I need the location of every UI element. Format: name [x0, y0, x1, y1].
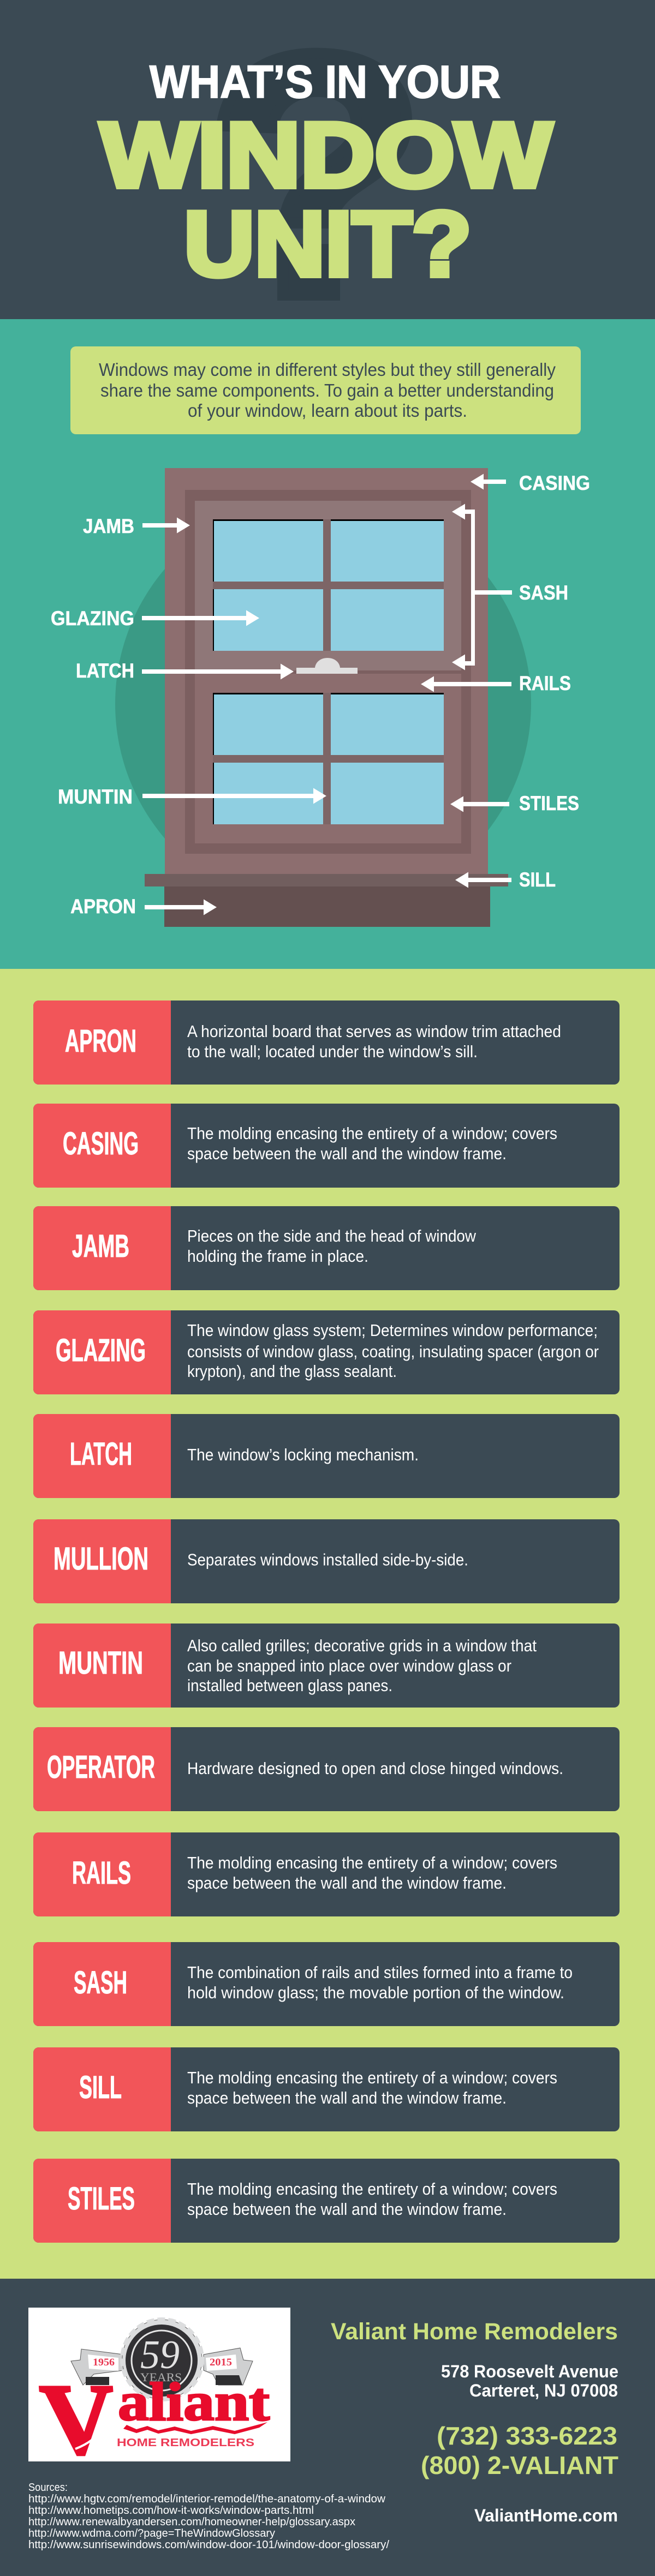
- arrow: jamb: [142, 517, 190, 534]
- jamb: [185, 490, 471, 854]
- card: jamb: Pieces on the side and the head of window: [187, 1226, 477, 1245]
- card: casing: The molding encasing the entirety of a window; covers: [187, 1124, 557, 1143]
- upper sash: [195, 501, 461, 670]
- arrow: apron: [145, 899, 217, 915]
- lower panes: [213, 693, 444, 824]
- title line 2: WINDOW: [100, 104, 552, 206]
- card: jamb: [33, 1206, 620, 1290]
- card: rails: The molding encasing the entirety of a window; covers: [187, 1853, 557, 1872]
- card: sash: SASH: [74, 1965, 127, 2000]
- card: rails: RAILS: [72, 1855, 131, 1891]
- diagram labels: GLAZING: [51, 607, 134, 630]
- card: glazing: [33, 1310, 620, 1394]
- card: stiles: [33, 2159, 620, 2243]
- address: [441, 2362, 618, 2400]
- card: apron: [33, 1001, 620, 1085]
- card: operator: OPERATOR: [47, 1750, 155, 1785]
- card: jamb: JAMB: [72, 1229, 129, 1264]
- card: apron: APRON: [65, 1023, 136, 1059]
- sources: http://www.hometips.com/how-it-works/window-parts.html: [28, 2505, 314, 2517]
- badge: 59: [140, 2333, 180, 2377]
- sources: http://www.sunrisewindows.com/window-door-101/window-door-glossary/: [28, 2539, 389, 2551]
- card: muntin: MUNTIN: [58, 1645, 143, 1681]
- logo: [28, 2308, 290, 2476]
- card: operator: Hardware designed to open and close hinged windows.: [187, 1759, 563, 1778]
- diagram labels: SILL: [519, 868, 556, 891]
- sources: http://www.renewalbyandersen.com/homeowner-help/glossary.aspx: [28, 2516, 355, 2528]
- card: muntin: can be snapped into place over window glass or: [187, 1656, 511, 1675]
- glossary panel: [0, 969, 655, 2279]
- sources: http://www.wdma.com/?page=TheWindowGlossary: [28, 2527, 275, 2539]
- arrow: muntin: [142, 788, 326, 804]
- valiant wordmark: aliant: [118, 2371, 270, 2432]
- card: rails: space between the wall and the window frame.: [187, 1873, 507, 1892]
- address: 578 Roosevelt Avenue: [441, 2362, 618, 2381]
- sources: Sources:: [28, 2482, 68, 2494]
- card: casing: [33, 1104, 620, 1188]
- header panel: [0, 0, 655, 369]
- card: casing: CASING: [63, 1126, 139, 1161]
- card: jamb: holding the frame in place.: [187, 1247, 368, 1266]
- badge: YEARS: [140, 2370, 182, 2384]
- card: sash: [33, 1942, 620, 2026]
- card: muntin: installed between glass panes.: [187, 1676, 392, 1695]
- card: latch: The window’s locking mechanism.: [187, 1445, 419, 1464]
- intro callout: share the same components. To gain a better understanding: [100, 380, 554, 400]
- diagram labels: CASING: [519, 472, 590, 494]
- card: sill: SILL: [79, 2070, 122, 2105]
- card: glazing: consists of window glass, coating, insulating spacer (argon or: [187, 1342, 599, 1361]
- latch: [296, 658, 358, 674]
- card: latch: LATCH: [70, 1436, 132, 1472]
- window illustration: [145, 468, 508, 927]
- casing: [165, 468, 488, 874]
- phone numbers: [421, 2422, 618, 2479]
- card: apron: A horizontal board that serves as window trim attached: [187, 1022, 561, 1041]
- diagram labels: LATCH: [76, 660, 134, 682]
- phone numbers: (800) 2-VALIANT: [421, 2451, 618, 2479]
- ribbons: [71, 2348, 253, 2385]
- logo: HOME REMODELERS: [117, 2437, 254, 2449]
- diagram labels: [51, 472, 590, 918]
- card: apron: to the wall; located under the window’s sill.: [187, 1042, 478, 1061]
- sources: [28, 2482, 389, 2551]
- card: casing: space between the wall and the window frame.: [187, 1144, 507, 1163]
- diagram labels: JAMB: [83, 515, 134, 537]
- card: sash: hold window glass; the movable portion of the window.: [187, 1983, 564, 2002]
- valiant wordmark: [38, 2364, 270, 2476]
- card: stiles: STILES: [68, 2181, 135, 2216]
- diagram labels: MUNTIN: [58, 786, 133, 808]
- valiant wordmark: V: [38, 2364, 119, 2476]
- apron: [164, 886, 490, 927]
- arrow: stiles: [450, 796, 509, 812]
- arrow: latch: [142, 663, 294, 680]
- arrow: sash bracket: [452, 504, 512, 670]
- card: glazing: krypton), and the glass sealant.: [187, 1362, 397, 1381]
- diagram labels: APRON: [70, 895, 136, 918]
- sources: http://www.hgtv.com/remodel/interior-remodel/the-anatomy-of-a-window: [28, 2493, 386, 2505]
- intro callout: [70, 346, 581, 434]
- arrow: casing: [471, 474, 506, 490]
- card: sash: The combination of rails and stiles formed into a frame to: [187, 1963, 573, 1982]
- card: mullion: MULLION: [53, 1541, 148, 1577]
- card: glazing: GLAZING: [56, 1333, 146, 1368]
- footer panel: [0, 2279, 655, 2576]
- website: ValiantHome.com: [474, 2506, 618, 2525]
- card: mullion: Separates windows installed side-by-side.: [187, 1550, 468, 1569]
- sill: [145, 874, 508, 886]
- card: stiles: The molding encasing the entirety of a window; covers: [187, 2179, 557, 2198]
- diagram panel: [0, 319, 655, 969]
- title line 1: WHAT’S IN YOUR: [150, 56, 501, 107]
- diagram labels: RAILS: [519, 672, 571, 694]
- card: rails: [33, 1832, 620, 1916]
- card: stiles: space between the wall and the window frame.: [187, 2200, 507, 2219]
- card: sill: The molding encasing the entirety of a window; covers: [187, 2068, 557, 2087]
- title line 3: UNIT?: [184, 193, 472, 295]
- badge: [122, 2319, 203, 2400]
- card: operator: [33, 1727, 620, 1811]
- intro callout: Windows may come in different styles but they still generally: [99, 360, 556, 380]
- card: latch: [33, 1414, 620, 1498]
- arrow: sill: [455, 872, 511, 888]
- upper panes: [213, 519, 444, 651]
- arrow: rails: [421, 676, 511, 692]
- card: muntin: Also called grilles; decorative grids in a window that: [187, 1636, 537, 1655]
- card: sill: space between the wall and the window frame.: [187, 2088, 507, 2107]
- background circle: [115, 496, 531, 912]
- phone numbers: (732) 333-6223: [437, 2422, 617, 2450]
- card: glazing: The window glass system; Determines window performance;: [187, 1321, 598, 1340]
- intro callout: of your window, learn about its parts.: [188, 400, 467, 421]
- company name: Valiant Home Remodelers: [331, 2319, 618, 2345]
- diagram labels: SASH: [519, 582, 568, 604]
- logo: 2015: [210, 2357, 232, 2368]
- lower sash: [195, 674, 461, 843]
- card: muntin: [33, 1624, 620, 1708]
- card: sill: [33, 2047, 620, 2131]
- diagram labels: STILES: [519, 792, 579, 814]
- arrow: glazing: [142, 610, 259, 626]
- card: mullion: [33, 1519, 620, 1603]
- address: Carteret, NJ 07008: [469, 2381, 618, 2400]
- logo: 1956: [93, 2357, 115, 2368]
